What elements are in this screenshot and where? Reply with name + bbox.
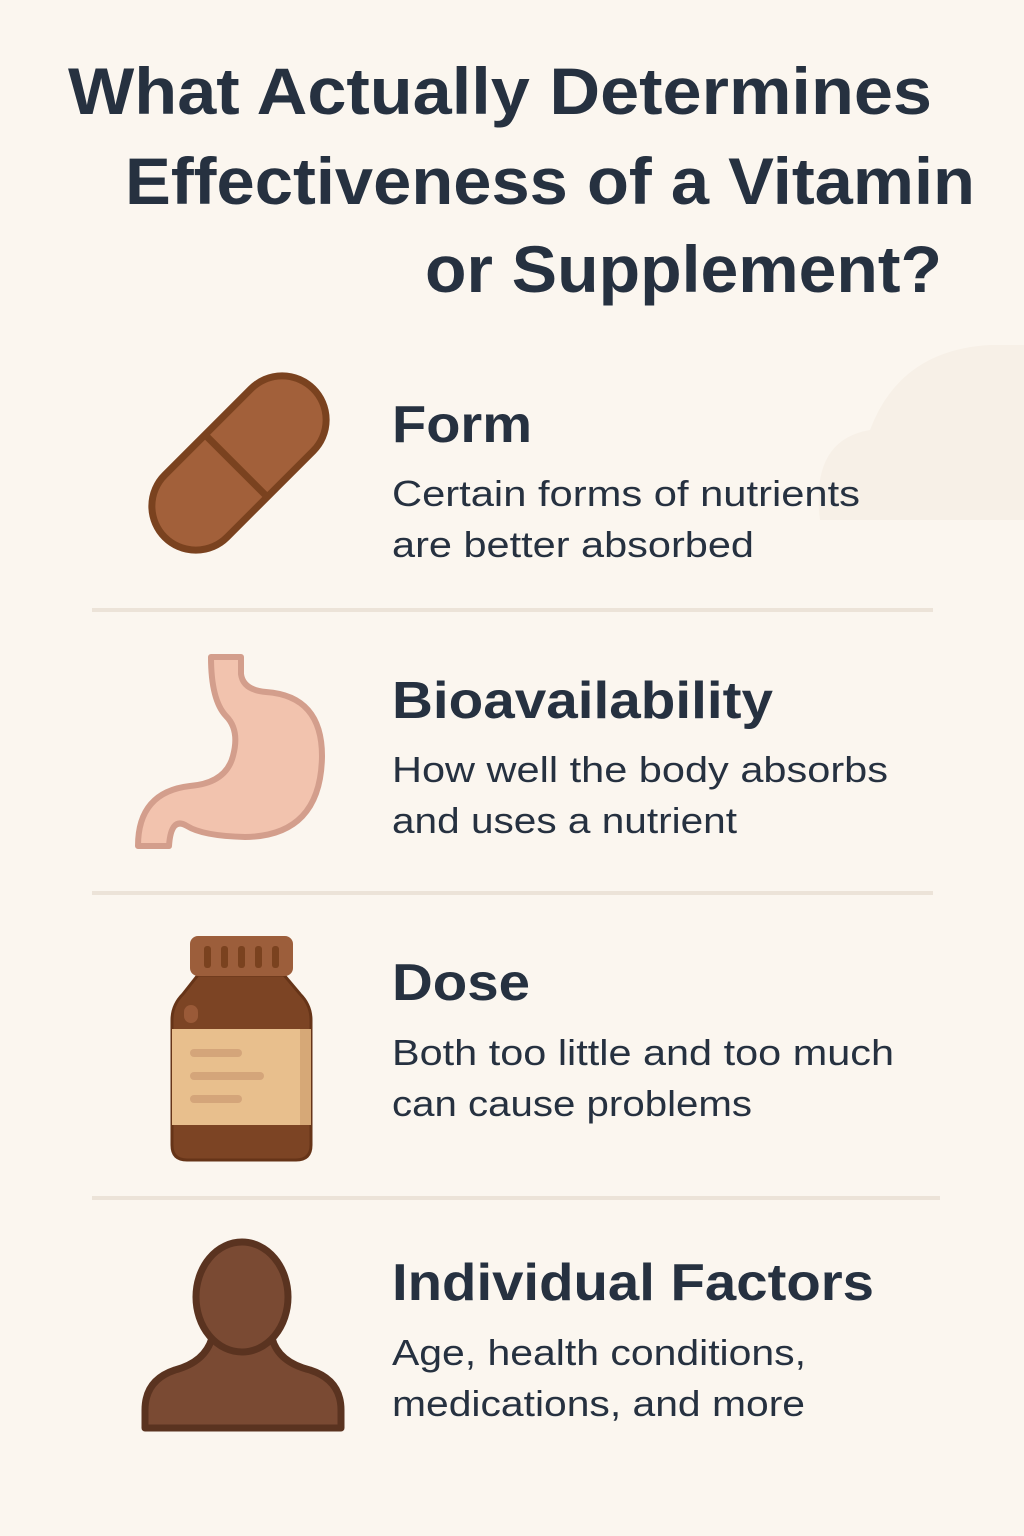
icon: person [145, 1242, 341, 1428]
text: form [392, 396, 860, 565]
text: individual factors: medications, and more [392, 1383, 805, 1424]
text: form: Form [392, 396, 532, 454]
title: Effectiveness of a Vitamin [125, 144, 975, 218]
title: or Supplement? [425, 232, 942, 306]
text: form: are better absorbed [392, 524, 754, 565]
text: bioavailability: How well the body absorbs [392, 749, 888, 790]
icon: bottle [172, 936, 311, 1160]
text: individual factors [392, 1254, 874, 1424]
text: dose: Both too little and too much [392, 1032, 894, 1073]
icon: stomach [138, 657, 322, 846]
text: individual factors: Individual Factors [392, 1254, 874, 1312]
icon: pill [134, 358, 344, 568]
title [68, 54, 975, 306]
title: What Actually Determines [68, 54, 932, 128]
text: dose: can cause problems [392, 1083, 752, 1124]
text: bioavailability: and uses a nutrient [392, 800, 737, 841]
text: bioavailability [392, 672, 888, 841]
text: bioavailability: Bioavailability [392, 672, 773, 730]
text: dose: Dose [392, 954, 530, 1012]
text: dose [392, 954, 894, 1124]
text: form: Certain forms of nutrients [392, 473, 860, 514]
text: individual factors: Age, health conditions, [392, 1332, 806, 1373]
